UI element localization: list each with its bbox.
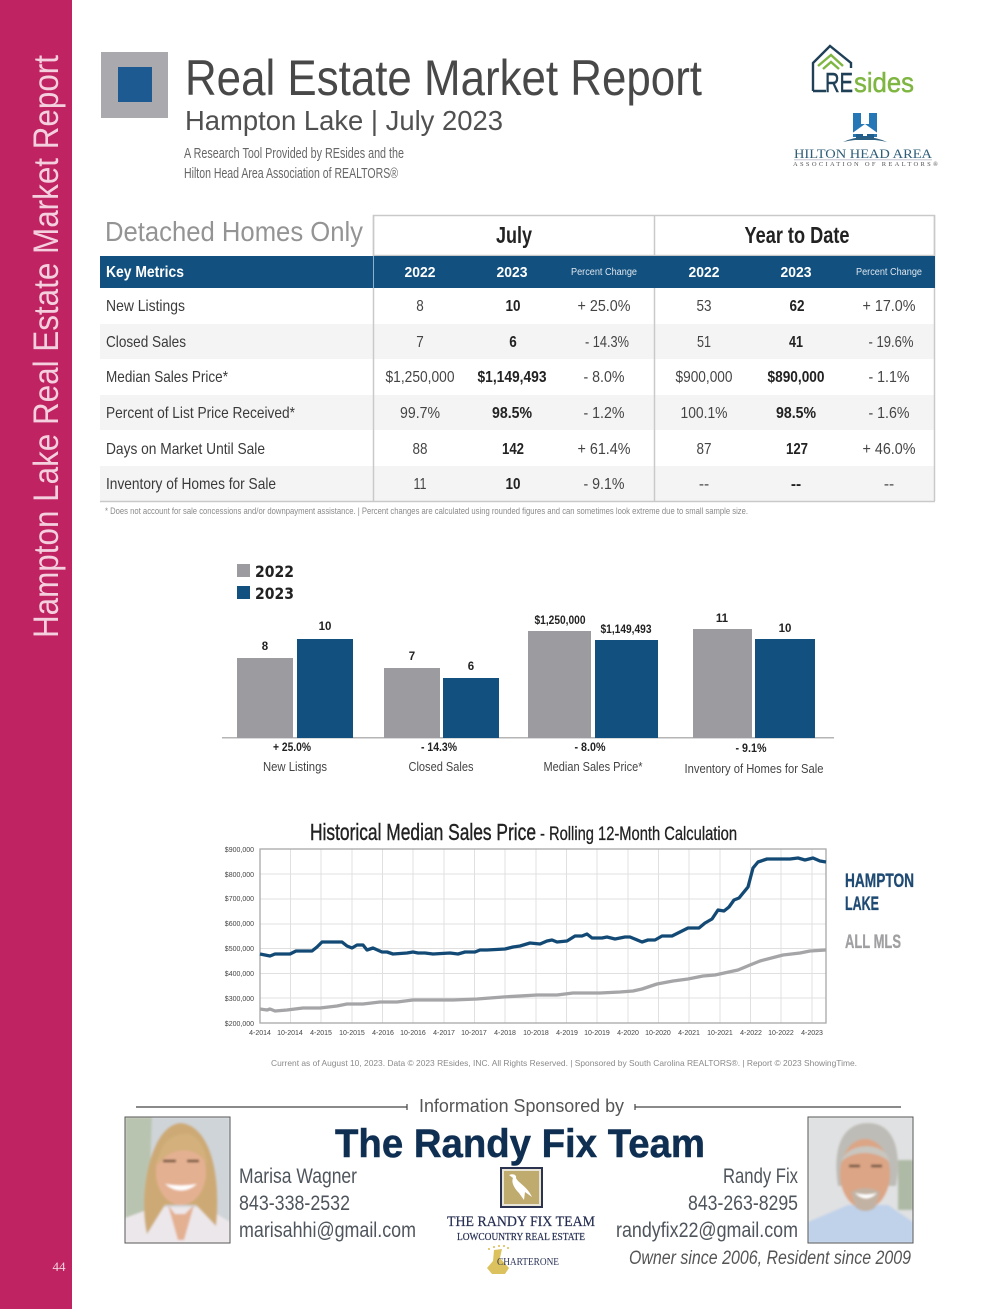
x axis labels: 10-2019 — [584, 1030, 610, 1037]
row: days on market: 127 — [786, 441, 808, 458]
x axis labels: 4-2015 — [310, 1030, 332, 1037]
y axis labels: $700,000 — [225, 896, 254, 903]
table header row: Percent Change — [571, 267, 637, 278]
row: new listings: + 25.0% — [578, 298, 631, 315]
x axis labels: 4-2014 — [249, 1030, 271, 1037]
title: Real Estate Market Report — [185, 50, 702, 106]
y axis labels: $300,000 — [225, 996, 254, 1003]
row: median sales price: - 8.0% — [584, 369, 625, 386]
page number: 44 — [52, 1259, 66, 1274]
row: inventory: -- — [791, 476, 801, 493]
row: percent of list price: 99.7% — [400, 405, 440, 422]
row: inventory: -- — [884, 476, 894, 493]
x axis labels: 4-2018 — [494, 1030, 516, 1037]
row: median sales price: $1,250,000 — [386, 369, 455, 386]
row: inventory — [106, 476, 894, 493]
row: inventory: Inventory of Homes for Sale — [106, 476, 276, 493]
sidebar title: Hampton Lake Real Estate Market Report — [27, 55, 66, 638]
table header row — [100, 256, 935, 288]
heading: detached homes only: Detached Homes Only — [105, 216, 363, 247]
row: percent of list price: - 1.6% — [868, 405, 910, 422]
y axis labels: $600,000 — [225, 921, 254, 928]
sponsor heading: Information Sponsored by — [419, 1096, 624, 1116]
intro text: A Research Tool Provided by REsides and the — [184, 145, 404, 162]
line: all MLS — [260, 950, 826, 1011]
bars: new listings: + 25.0% — [273, 742, 311, 754]
row: median sales price: $900,000 — [676, 369, 733, 386]
row: days on market: 87 — [696, 441, 712, 458]
row: new listings — [106, 298, 916, 315]
row: percent of list price: 98.5% — [492, 405, 532, 422]
row: percent of list price — [106, 405, 910, 422]
metrics table — [100, 215, 935, 502]
photo: Marisa Wagner — [125, 1117, 230, 1243]
line chart title: Historical Median Sales Price — [310, 819, 536, 845]
column group: July: July — [496, 222, 532, 248]
contact: Randy Fix — [616, 1165, 798, 1242]
bars: new listings — [237, 621, 353, 774]
y axis labels — [225, 847, 254, 1028]
x axis labels: 4-2022 — [740, 1030, 762, 1037]
y axis labels: $800,000 — [225, 872, 254, 879]
tagline: Owner since 2006, Resident since 2009 — [629, 1248, 911, 1269]
bars: median sales price: $1,250,000 — [534, 615, 586, 627]
bars: closed sales — [384, 651, 499, 774]
bars: inventory: Inventory of Homes for Sale — [684, 761, 824, 776]
row: closed sales: 7 — [416, 334, 424, 351]
bars: new listings: 8 — [262, 641, 269, 653]
intro text: Hilton Head Area Association of REALTORS® — [184, 165, 398, 182]
row: new listings: 53 — [696, 298, 712, 315]
row: median sales price: $1,149,493 — [478, 369, 547, 386]
line chart legend: ALL MLS — [845, 932, 901, 953]
bars: inventory: - 9.1% — [736, 743, 766, 755]
x axis labels: 4-2020 — [617, 1030, 639, 1037]
bars: new listings: 10 — [319, 621, 331, 633]
table header row: Key Metrics — [106, 264, 184, 281]
x axis labels — [249, 1030, 823, 1037]
y axis labels: $500,000 — [225, 946, 254, 953]
row: new listings: 62 — [790, 298, 804, 315]
row: closed sales: 51 — [697, 334, 711, 351]
x axis labels: 4-2019 — [556, 1030, 578, 1037]
row: days on market: 88 — [412, 441, 428, 458]
team name: The Randy Fix Team — [335, 1122, 705, 1166]
row: new listings: 10 — [506, 298, 520, 315]
contact: Randy Fix: 843-263-8295 — [688, 1192, 798, 1215]
photo: Randy Fix — [808, 1117, 913, 1243]
bars: inventory: 11 — [716, 613, 729, 625]
line chart title: - Rolling 12-Month Calculation — [540, 824, 737, 845]
bars: closed sales: Closed Sales — [408, 759, 474, 774]
row: new listings: + 17.0% — [862, 298, 916, 315]
row: closed sales: - 14.3% — [585, 334, 629, 351]
line chart — [225, 847, 826, 1037]
row: new listings: New Listings — [106, 298, 185, 315]
logo: CharterOne — [487, 1246, 559, 1274]
x axis labels: 10-2022 — [768, 1030, 794, 1037]
row: inventory: 11 — [414, 476, 426, 493]
table header row: 2022 — [404, 264, 436, 281]
y axis labels: $400,000 — [225, 971, 254, 978]
logo: REsides: sides — [854, 67, 914, 98]
row: days on market — [106, 441, 916, 458]
row: closed sales: 41 — [789, 334, 803, 351]
row: closed sales: 6 — [509, 334, 517, 351]
bar chart — [222, 613, 834, 776]
bar chart legend: 2023 — [255, 584, 294, 603]
row: median sales price: - 1.1% — [868, 369, 910, 386]
row: days on market: + 61.4% — [578, 441, 631, 458]
logo: team emblem: LOWCOUNTRY REAL ESTATE — [457, 1231, 585, 1243]
x axis labels: 10-2014 — [277, 1030, 303, 1037]
row: days on market: Days on Market Until Sale — [106, 441, 265, 458]
row: median sales price: Median Sales Price* — [106, 369, 228, 386]
column group: Year to Date: Year to Date — [744, 222, 850, 248]
row: closed sales — [106, 334, 914, 351]
logo: Hilton Head Area — [793, 113, 938, 168]
x axis labels: 10-2021 — [707, 1030, 733, 1037]
row: percent of list price: 98.5% — [776, 405, 816, 422]
subtitle: Hampton Lake | July 2023 — [185, 105, 503, 136]
table header row: 2023 — [496, 264, 528, 281]
row: new listings: 8 — [416, 298, 424, 315]
x axis labels: 10-2020 — [645, 1030, 671, 1037]
bars: closed sales: 7 — [409, 651, 415, 663]
contact: Marisa Wagner — [239, 1165, 416, 1242]
x axis labels: 10-2017 — [461, 1030, 487, 1037]
x axis labels: 10-2015 — [339, 1030, 365, 1037]
row: closed sales: - 19.6% — [868, 334, 914, 351]
row: closed sales: Closed Sales — [106, 334, 186, 351]
contact: Marisa Wagner: Marisa Wagner — [239, 1165, 357, 1188]
bars: median sales price: - 8.0% — [574, 742, 606, 754]
table header row: 2023 — [780, 264, 812, 281]
row: percent of list price: Percent of List Price Received* — [106, 405, 295, 422]
contact: Marisa Wagner: marisahhi@gmail.com — [239, 1219, 416, 1242]
logo: Hilton Head Area: ASSOCIATION OF REALTORS® — [793, 161, 938, 168]
logo: REsides — [813, 46, 914, 98]
contact: Randy Fix: randyfix22@gmail.com — [616, 1219, 798, 1242]
bars: closed sales: - 14.3% — [421, 742, 457, 754]
bars: median sales price: $1,149,493 — [600, 624, 652, 636]
line chart legend — [845, 871, 914, 953]
x axis labels: 4-2021 — [678, 1030, 700, 1037]
row: median sales price — [106, 369, 910, 386]
logo: CharterOne: CHARTERONE — [497, 1257, 559, 1268]
bars: inventory — [684, 613, 824, 776]
x axis labels: 4-2023 — [801, 1030, 823, 1037]
line: Hampton Lake — [260, 858, 826, 956]
bar chart legend — [237, 562, 294, 603]
sidebar — [0, 0, 72, 1309]
logo: team emblem: THE RANDY FIX TEAM — [447, 1214, 595, 1230]
bars: inventory: 10 — [779, 623, 791, 635]
row: percent of list price: 100.1% — [680, 405, 728, 422]
x axis labels: 10-2016 — [400, 1030, 426, 1037]
logo: REsides: RE — [825, 67, 853, 98]
row: inventory: -- — [699, 476, 709, 493]
row: percent of list price: - 1.2% — [584, 405, 625, 422]
row: median sales price: $890,000 — [768, 369, 824, 386]
line chart legend: HAMPTON — [845, 871, 914, 892]
bars: new listings: New Listings — [263, 759, 327, 774]
row: inventory: - 9.1% — [584, 476, 625, 493]
logo: team emblem — [447, 1167, 595, 1243]
contact: Randy Fix: Randy Fix — [723, 1165, 798, 1188]
line chart legend: LAKE — [845, 894, 879, 915]
table header row: Percent Change — [856, 267, 922, 278]
row: days on market: 142 — [502, 441, 524, 458]
bars: median sales price — [528, 615, 658, 774]
icon: report square — [101, 52, 168, 118]
bars: median sales price: Median Sales Price* — [544, 759, 642, 774]
row: inventory: 10 — [506, 476, 520, 493]
bar chart legend: 2022 — [255, 562, 294, 581]
data source note: Current as of August 10, 2023. Data © 2023 REsides, INC. All Rights Reserved. | Sponsored by South Carolina REALTORS®. | Report © 2023 ShowingTime. — [271, 1058, 857, 1068]
logo: Hilton Head Area: HILTON HEAD AREA — [794, 146, 933, 161]
x axis labels: 4-2017 — [433, 1030, 455, 1037]
x axis labels: 4-2016 — [372, 1030, 394, 1037]
x axis labels: 10-2018 — [523, 1030, 549, 1037]
sponsor heading — [136, 1096, 901, 1116]
y axis labels: $900,000 — [225, 847, 254, 854]
table footnote: * Does not account for sale concessions and/or downpayment assistance. | Percent changes are calculated using rounded figures and can sometimes look extreme due to small sample size. — [105, 506, 748, 516]
bars: closed sales: 6 — [468, 661, 474, 673]
row: days on market: + 46.0% — [862, 441, 916, 458]
intro text — [184, 145, 404, 182]
table header row: 2022 — [688, 264, 720, 281]
y axis labels: $200,000 — [225, 1021, 254, 1028]
contact: Marisa Wagner: 843-338-2532 — [239, 1192, 350, 1215]
